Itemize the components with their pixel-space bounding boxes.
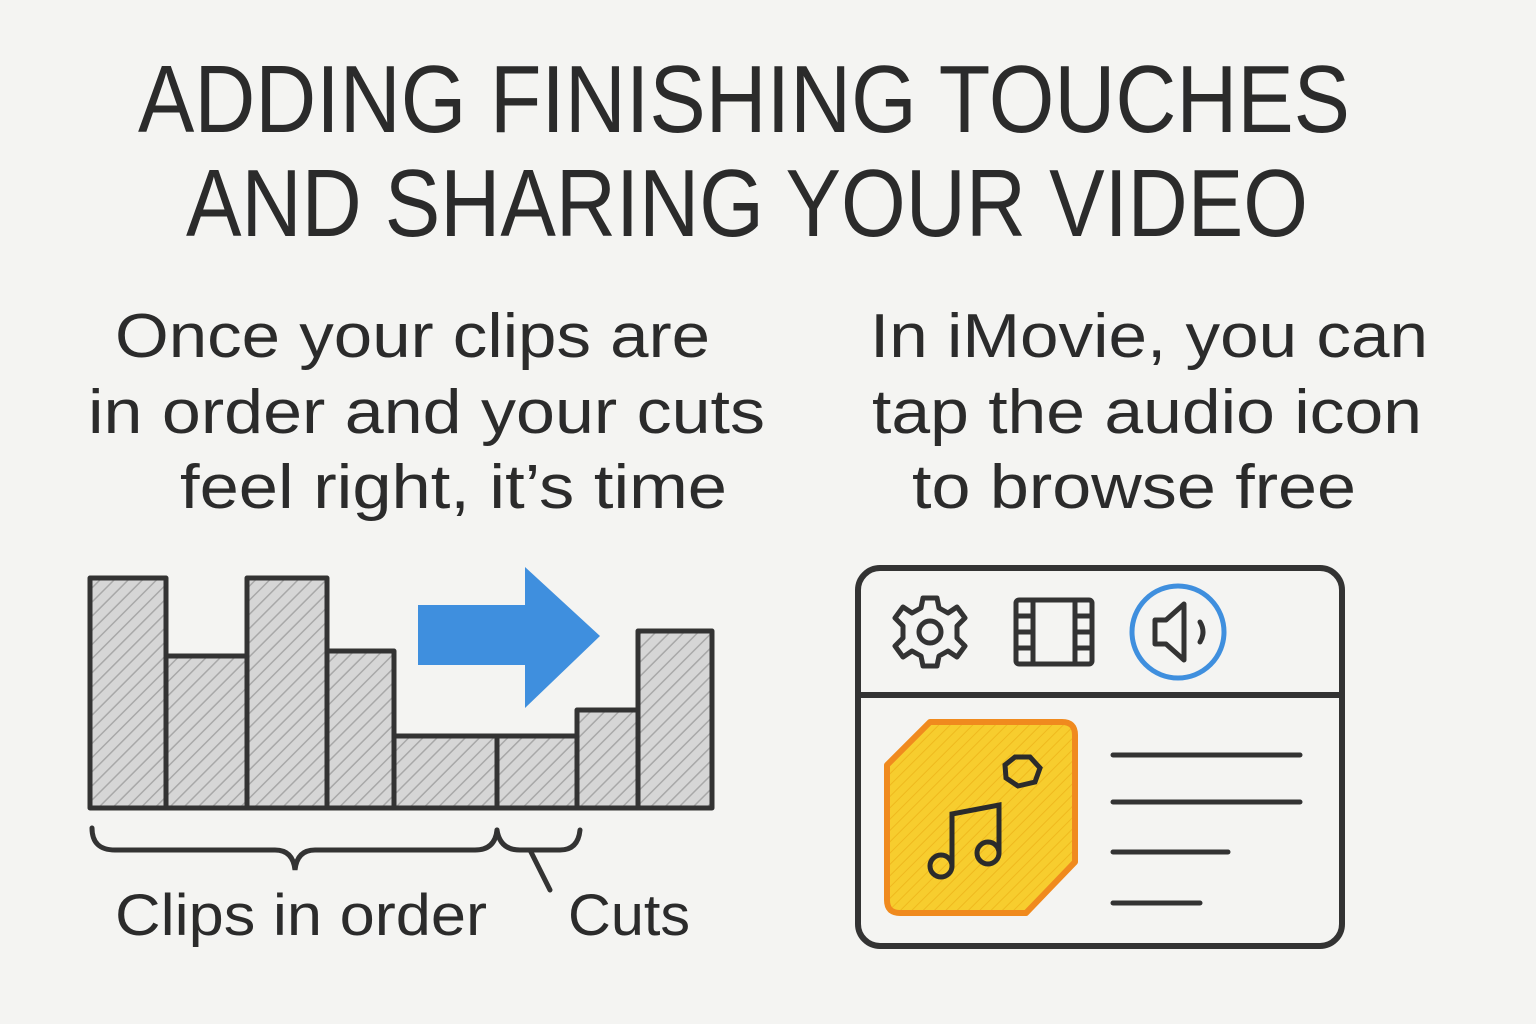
- title: ADDING FINISHING TOUCHES: [138, 46, 1350, 153]
- icon: music tile: [887, 722, 1075, 913]
- text block: right: [870, 302, 1428, 522]
- icon: gear: [895, 598, 965, 666]
- text block: right: In iMovie, you can: [870, 302, 1428, 371]
- brace: cuts: [497, 830, 580, 890]
- icon: film: [1016, 600, 1092, 664]
- arrow: blue right: [418, 567, 600, 708]
- text block: left: [88, 302, 765, 522]
- text lines: [1113, 755, 1300, 903]
- panel: imovie window: [858, 568, 1342, 946]
- brace: clips in order: [92, 828, 497, 870]
- icon: speaker: [1132, 586, 1224, 678]
- label: clips in order: Clips in order: [115, 883, 487, 948]
- title: AND SHARING YOUR VIDEO: [186, 150, 1308, 257]
- text block: left: Once your clips are: [115, 302, 710, 371]
- bar chart: clips: [90, 578, 712, 808]
- title: [138, 46, 1350, 257]
- text block: right: tap the audio icon: [872, 378, 1422, 447]
- text block: right: to browse free: [912, 453, 1356, 522]
- text block: left: in order and your cuts: [88, 378, 765, 447]
- text block: left: feel right, it’s time: [180, 453, 727, 522]
- label: cuts: Cuts: [568, 883, 690, 948]
